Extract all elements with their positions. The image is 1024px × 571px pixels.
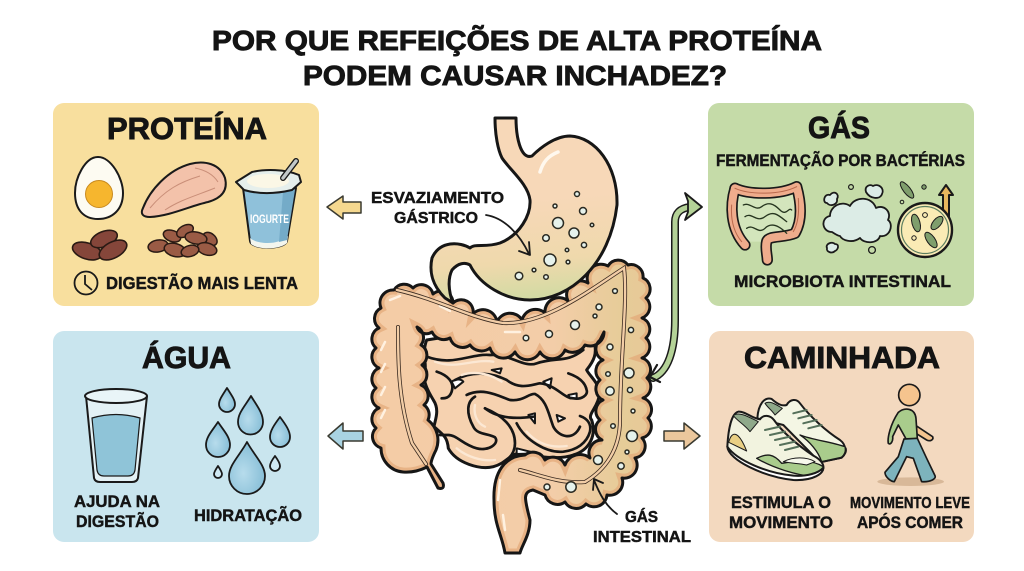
text: estimula o movimento: MOVIMENTO (729, 514, 833, 532)
label: gás intestinal: INTESTINAL (593, 529, 691, 546)
icon: bacteria dish (898, 180, 953, 257)
loop highlights (435, 361, 567, 460)
gaps between loops (452, 368, 577, 454)
panel: proteína (53, 103, 319, 306)
arrow: to caminhada (664, 423, 700, 449)
panel: água (53, 331, 319, 542)
heading: água: ÁGUA (142, 340, 231, 375)
heading: proteína: PROTEÍNA (107, 111, 267, 146)
icon: yogurt cup (236, 161, 301, 248)
text: hidratação: HIDRATAÇÃO (194, 505, 302, 525)
title: POR QUE REFEIÇÕES DE ALTA PROTEÍNA (212, 25, 822, 56)
icon: glass of water (85, 389, 147, 482)
text: ajuda na digestão: AJUDA NA (74, 493, 160, 511)
text: microbiota intestinal: MICROBIOTA INTESTINAL (734, 272, 951, 291)
panel: gás (708, 103, 974, 306)
icon: yogurt cup: IOGURTE (250, 214, 289, 226)
arrow: to gás (650, 193, 702, 382)
rear shoe (757, 399, 846, 462)
text: estimula o movimento (729, 494, 833, 532)
colon outline (372, 260, 652, 553)
text: movimento leve após comer (850, 495, 970, 532)
text: estimula o movimento: ESTIMULA O (731, 494, 831, 512)
colon inner lines (397, 268, 625, 482)
icon: intestine (731, 187, 800, 260)
arrow: to stomach (486, 215, 530, 255)
icon: sneakers (727, 399, 846, 480)
icon: water drops (206, 388, 290, 494)
icon: beans middle (147, 222, 220, 259)
loop lines (427, 350, 590, 463)
heading: caminhada: CAMINHADA (744, 340, 940, 375)
heading: gás: GÁS (808, 110, 870, 145)
label: esvaziamento gástrico (371, 190, 530, 255)
arrow: to proteína (327, 196, 361, 219)
illustration: stomach (431, 118, 617, 303)
title (212, 25, 822, 91)
stomach highlight (540, 152, 558, 172)
text: ajuda na digestão: DIGESTÃO (76, 511, 159, 531)
icon: egg (75, 157, 123, 219)
intestinal gas bubbles (523, 289, 638, 492)
icon: clock (74, 272, 98, 294)
illustration: small intestine (424, 327, 599, 467)
text: movimento leve após comer: APÓS COMER (857, 513, 963, 532)
label: esvaziamento gástrico: ESVAZIAMENTO (371, 190, 504, 207)
text: movimento leve após comer: MOVIMENTO LEVE (850, 495, 970, 512)
label: gás intestinal (593, 479, 691, 546)
arrow: to água (328, 423, 363, 449)
stomach bubbles (515, 192, 594, 280)
icon: gas cloud (823, 185, 891, 253)
text: fermentação: FERMENTAÇÃO POR BACTÉRIAS (716, 150, 965, 170)
icon: chicken breast (142, 163, 226, 217)
front shoe (727, 412, 823, 480)
title: PODEM CAUSAR INCHADEZ? (303, 60, 727, 91)
icon: beans left (70, 227, 130, 264)
colon edge shading (372, 260, 652, 553)
colon highlights (381, 296, 520, 530)
label: gás intestinal: GÁS (625, 509, 658, 526)
text: ajuda na digestão (74, 493, 160, 531)
icon: walking person (877, 384, 944, 486)
label: esvaziamento gástrico: GÁSTRICO (394, 208, 478, 227)
text: digestão mais lenta: DIGESTÃO MAIS LENTA (106, 272, 298, 293)
illustration: colon (372, 260, 652, 553)
panel: caminhada (709, 331, 974, 542)
arrow: to colon (593, 479, 617, 514)
